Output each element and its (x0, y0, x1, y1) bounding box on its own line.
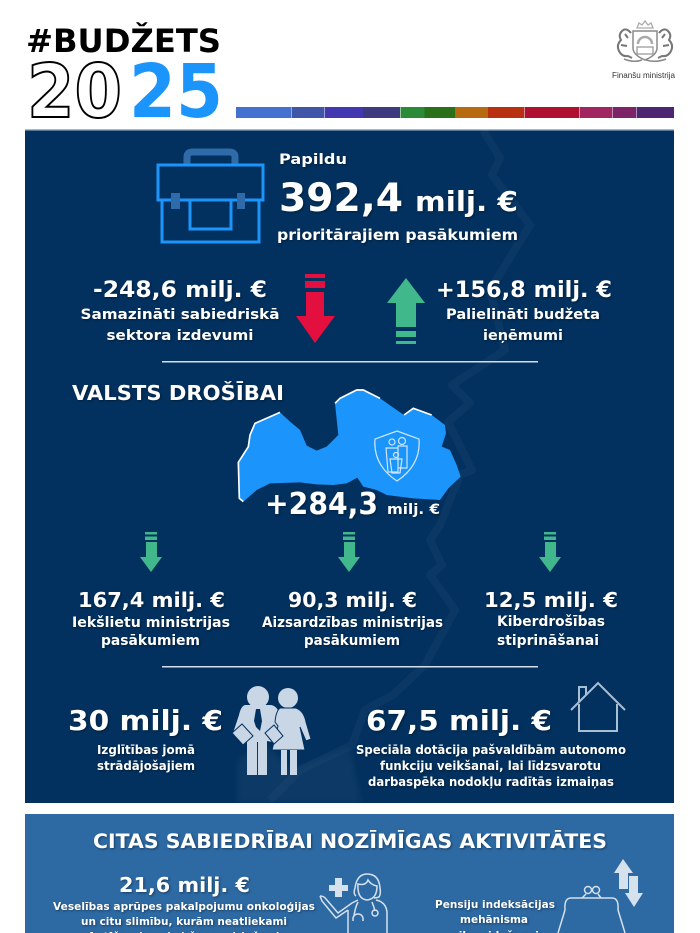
text: healthcare 21,6 milj. €: un citu slimību, kurām neatliekami (81, 915, 287, 928)
text: Defence ministry: 90,3 milj. € (288, 588, 417, 612)
panel: main budget (25, 129, 674, 803)
text: revenue increase: ieņēmumi (483, 328, 563, 344)
text: pensions (435, 898, 555, 933)
icon: briefcase (158, 152, 263, 242)
title: #BUDŽETS 2025: 25 (129, 49, 223, 135)
text: education 30 milj. €: 30 milj. € (68, 704, 223, 737)
text: Defence ministry: Aizsardzības ministrijas (262, 615, 443, 631)
text: Interior ministry: pasākumiem (101, 633, 200, 649)
text: municipalities 67,5 milj. € (356, 704, 626, 789)
text: Cybersecurity: Kiberdrošības (497, 614, 605, 630)
text: pensions: mehānisma (460, 913, 528, 926)
text: municipalities 67,5 milj. €: funkciju veikšanai, lai līdzsvarotu (380, 759, 601, 773)
arrow: green down 3 (539, 532, 561, 572)
text: healthcare 21,6 milj. € (53, 873, 315, 933)
text: Interior ministry: 167,4 milj. € (78, 588, 225, 612)
text: revenue increase: Palielināti budžeta (446, 307, 600, 323)
text: Defence ministry: pasākumiem (304, 633, 400, 649)
icon: teachers (232, 686, 311, 775)
text: Interior ministry: Iekšlietu ministrijas (72, 615, 230, 631)
arrow: green down 2 (338, 532, 360, 572)
text: expenditure reduction: sektora izdevumi (106, 328, 254, 344)
icon: family shield (375, 431, 419, 481)
icon: doctor (320, 874, 387, 933)
text: Cybersecurity (484, 588, 618, 649)
text: Cybersecurity: 12,5 milj. € (484, 588, 618, 612)
text: Papildu 392,4 milj. €: milj. € (415, 185, 518, 218)
arrow: green down 1 (140, 532, 162, 572)
title: #BUDŽETS 2025 (26, 22, 223, 135)
text: Papildu 392,4 milj. €: prioritārajiem pasākumiem (277, 226, 518, 244)
text: pensions: Pensiju indeksācijas (435, 898, 555, 911)
colour stripe (236, 107, 674, 118)
arrow: green up (387, 278, 425, 344)
text: +284,3 milj. €: milj. € (387, 502, 440, 518)
arrow: red down (296, 274, 335, 343)
title: #BUDŽETS 2025: 20 (27, 49, 122, 135)
logo: Finanšu ministrija coat of arms: Finanšu ministrija (612, 70, 675, 80)
text: expenditure reduction (80, 278, 280, 344)
text: Papildu 392,4 milj. €: 392,4 (279, 176, 403, 221)
text: expenditure reduction: Samazināti sabiedriskā (80, 307, 280, 323)
decorative river map line (237, 130, 530, 803)
text: education 30 milj. €: Izglītības jomā (97, 743, 195, 757)
icon: purse (558, 886, 625, 933)
panel: other socially important activities (25, 814, 674, 933)
text: revenue increase (436, 278, 612, 344)
text: education 30 milj. €: strādājošajiem (97, 759, 195, 773)
text: +284,3 milj. €: +284,3 (265, 487, 378, 522)
text: municipalities 67,5 milj. €: 67,5 milj. € (366, 704, 552, 737)
text: Cybersecurity: stiprināšanai (497, 633, 599, 649)
text: municipalities 67,5 milj. €: darbaspēka nodokļu radītās izmaiņas (368, 775, 614, 789)
map: Latvia (238, 390, 461, 502)
text: healthcare 21,6 milj. €: Veselības aprūpes pakalpojumu onkoloģijas (53, 900, 315, 913)
text: +284,3 milj. € (265, 487, 440, 522)
text: Defence ministry (262, 588, 443, 649)
heading: other activities: CITAS SABIEDRĪBAI NOZĪMĪGAS AKTIVITĀTES (93, 830, 607, 853)
text: expenditure reduction: -248,6 milj. € (93, 278, 267, 303)
text: municipalities 67,5 milj. €: Speciāla dotācija pašvaldībām autonomo (356, 743, 626, 757)
text: revenue increase: +156,8 milj. € (436, 278, 612, 303)
icon: house (571, 683, 625, 731)
text: Papildu 392,4 milj. € (277, 152, 518, 244)
text: Interior ministry (72, 588, 230, 649)
text: Papildu 392,4 milj. €: Papildu (279, 152, 347, 168)
text: healthcare 21,6 milj. €: 21,6 milj. € (119, 873, 250, 897)
title: #BUDŽETS 2025: #BUDŽETS (26, 22, 221, 60)
heading: VALSTS DROŠĪBAI: VALSTS DROŠĪBAI (72, 381, 284, 405)
icon: up and down arrows (614, 859, 643, 907)
text: education 30 milj. € (68, 704, 223, 773)
logo: Finanšu ministrija coat of arms (612, 21, 675, 80)
